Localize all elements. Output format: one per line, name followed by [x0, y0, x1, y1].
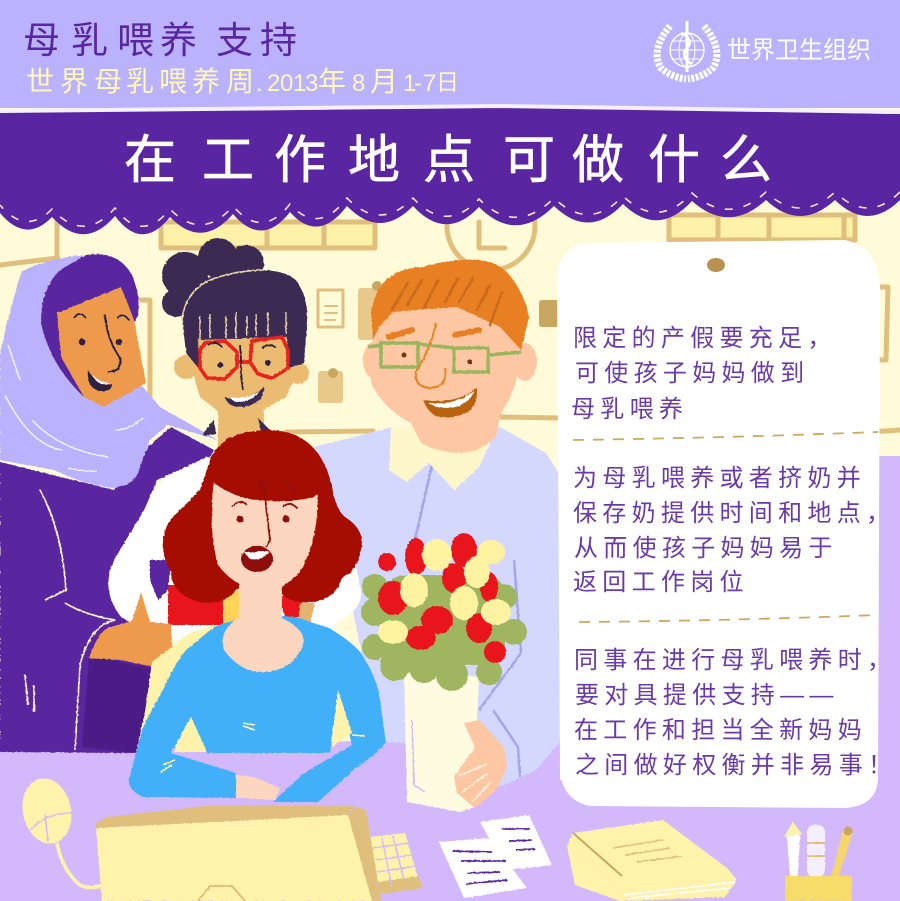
white coat — [108, 457, 361, 640]
mouse body — [17, 774, 77, 848]
mouth — [225, 387, 264, 407]
sleeve shadow — [82, 655, 154, 753]
mouth — [241, 546, 273, 572]
book pages — [567, 846, 737, 901]
man's hand — [454, 720, 507, 808]
sleeve line — [25, 490, 115, 750]
red flowers — [378, 533, 506, 663]
vase — [404, 670, 479, 812]
text block 1 — [571, 325, 837, 423]
text block 1: 母乳喂养 — [571, 396, 688, 423]
pen 2 band — [807, 843, 825, 856]
woman in hijab — [0, 254, 218, 753]
subtitle month: 8 — [352, 70, 365, 97]
text block 2: 为母乳喂养或者挤奶并 — [573, 465, 866, 492]
red jacket left — [168, 585, 224, 625]
leaves — [361, 574, 527, 691]
man nose — [416, 323, 445, 388]
man hair — [371, 260, 529, 350]
hijab folds — [5, 345, 143, 471]
man ears — [363, 342, 537, 381]
text block 1: 可使孩子妈妈做到 — [575, 360, 809, 387]
red jacket right — [279, 590, 304, 617]
red hair — [163, 430, 362, 603]
WHO logo — [657, 21, 871, 79]
white edge of awning — [0, 106, 900, 112]
keyboard grid — [372, 836, 416, 888]
yellow flowers — [378, 539, 511, 644]
thumbs up hand — [89, 592, 173, 667]
text block 2: 返回工作岗位 — [573, 569, 749, 596]
pencil — [831, 830, 853, 878]
left arm gap — [174, 717, 207, 752]
paper lower — [439, 838, 527, 898]
teeth — [230, 391, 260, 402]
text block 3: 在工作和担当全新妈妈 — [574, 717, 867, 744]
book — [567, 820, 737, 901]
man eyebrows — [389, 330, 479, 337]
face — [57, 287, 146, 407]
subtitle year: 年 — [318, 66, 346, 97]
papers — [439, 815, 552, 898]
right arm gap — [332, 690, 352, 747]
illustration: people — [0, 238, 560, 812]
subtitle month glyph: 月 — [370, 66, 398, 97]
spine — [573, 833, 622, 876]
text block 2 — [573, 465, 895, 596]
keyboard top — [370, 833, 421, 892]
hair fringe — [211, 437, 332, 501]
jacket under hair — [150, 560, 315, 626]
vase highlight — [412, 720, 425, 792]
yellow chair — [143, 625, 215, 727]
keyboard — [370, 833, 423, 894]
desk — [0, 740, 900, 901]
hood — [41, 254, 139, 397]
collar curls — [203, 418, 270, 436]
mouse cord — [57, 843, 102, 888]
text block 1: 限定的产假要充足， — [573, 325, 837, 352]
ears — [174, 355, 309, 384]
paper lines — [452, 829, 535, 884]
hijab — [0, 255, 218, 488]
divider 1 — [573, 432, 878, 440]
pencil tip — [844, 826, 852, 836]
subtitle day glyph: 日 — [436, 69, 459, 95]
man eyes — [402, 352, 472, 364]
bangs lines — [200, 312, 286, 340]
subtitle days: 1-7 — [403, 70, 436, 97]
sweater details — [160, 723, 365, 772]
teeth — [92, 374, 110, 384]
buns — [162, 238, 264, 317]
eyes and nose — [208, 343, 276, 390]
panel card — [557, 240, 880, 808]
face features — [232, 480, 298, 547]
pen 2 — [807, 825, 825, 877]
divider 2 — [579, 615, 878, 622]
woman with glasses — [108, 238, 361, 640]
man teeth — [428, 391, 474, 408]
pen 1 tip — [784, 822, 802, 837]
title: 在工作地点可做什么 — [124, 132, 772, 190]
yellow top — [223, 590, 240, 626]
blue sweater — [129, 616, 386, 802]
page edges — [625, 882, 735, 898]
header band — [0, 0, 900, 108]
awning shape with scallops — [0, 107, 900, 234]
body — [0, 427, 214, 753]
hair — [182, 269, 307, 370]
front woman — [129, 430, 386, 802]
text block 3 — [574, 647, 897, 779]
book cover — [567, 820, 737, 897]
face — [212, 480, 318, 590]
man shirt button line — [415, 465, 521, 777]
text block 3: 要对具提供支持—— — [575, 682, 839, 709]
desk items — [17, 774, 853, 901]
neck — [223, 575, 304, 672]
wall background — [0, 190, 900, 790]
vase and flowers — [361, 533, 527, 812]
wall decorations — [0, 182, 900, 432]
pen 1 — [787, 823, 800, 876]
subtitle dates: .2013 — [256, 70, 318, 97]
pin — [707, 258, 725, 272]
pen cup — [784, 822, 853, 901]
teeth — [243, 551, 270, 559]
text block 3: 之间做好权衡并非易事！ — [575, 752, 897, 779]
monitor front — [96, 815, 379, 901]
cup — [785, 876, 852, 901]
text block 2: 保存奶提供时间和地点， — [573, 500, 895, 527]
subtitle week name: 世界母乳喂养周 — [26, 66, 254, 97]
purple scarf bit — [150, 560, 171, 600]
man hair strokes — [392, 278, 502, 325]
man shirt — [314, 427, 560, 790]
finger lines — [458, 764, 491, 802]
mouse buttons — [30, 813, 72, 842]
keyboard edge — [378, 876, 423, 894]
monitor side — [348, 807, 381, 901]
man glasses — [368, 343, 521, 372]
man — [314, 260, 560, 790]
woman's hand — [236, 775, 280, 800]
features — [74, 314, 129, 372]
monitor top — [96, 805, 355, 828]
WHO emblem — [657, 21, 717, 79]
man face — [369, 307, 521, 453]
monitor — [96, 805, 381, 901]
face — [193, 337, 300, 420]
WHO name: 世界卫生组织 — [727, 37, 871, 64]
purple awning — [0, 106, 900, 234]
tan panel — [298, 603, 315, 625]
man collar — [389, 427, 498, 490]
text block 3: 同事在进行母乳喂养时， — [574, 647, 896, 674]
hair band — [182, 270, 264, 320]
mouth — [88, 370, 112, 391]
subtitle — [26, 66, 459, 97]
neck — [218, 410, 264, 460]
paper upper — [480, 815, 552, 870]
wall lower right purple — [878, 456, 900, 796]
awning stitching — [0, 192, 900, 226]
page lines — [613, 840, 682, 862]
monitor logo — [198, 886, 245, 901]
info panel — [557, 240, 897, 808]
text block 2: 从而使孩子妈妈易于 — [574, 535, 838, 562]
man mouth — [423, 388, 477, 417]
mouse — [17, 774, 102, 888]
heading: 母乳喂养支持 — [23, 20, 297, 61]
red glasses — [200, 337, 288, 379]
